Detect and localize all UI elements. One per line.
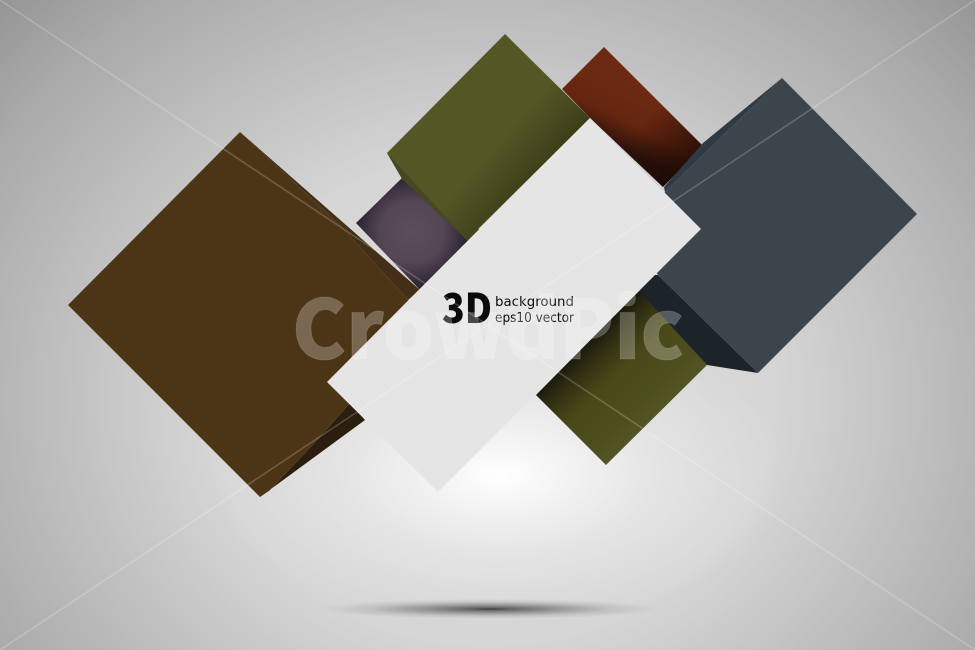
cube side: upper sliver <box>240 132 420 300</box>
cube side: lower sliver <box>260 403 365 497</box>
cube: brown <box>68 132 420 497</box>
cube side: dark lower face <box>640 275 758 373</box>
cube main face <box>68 132 420 497</box>
subtitle line: background: background <box>495 294 574 310</box>
cube side: dark top sliver <box>664 78 782 192</box>
white label panel <box>327 118 701 492</box>
block: purple <box>356 178 470 290</box>
block: red <box>562 47 703 187</box>
title: 3D: 3D <box>442 275 492 335</box>
light glow <box>200 320 800 630</box>
cube main face <box>640 78 917 373</box>
watermark: CrowdPic: CrowdPic <box>292 264 684 383</box>
subtitle line: eps10 vector: eps10 vector <box>495 310 574 326</box>
block: olive top <box>387 34 590 243</box>
cube: slate blue <box>640 78 917 373</box>
floor shadow <box>320 599 660 619</box>
title text block <box>442 275 574 335</box>
block: olive bottom <box>536 290 707 465</box>
